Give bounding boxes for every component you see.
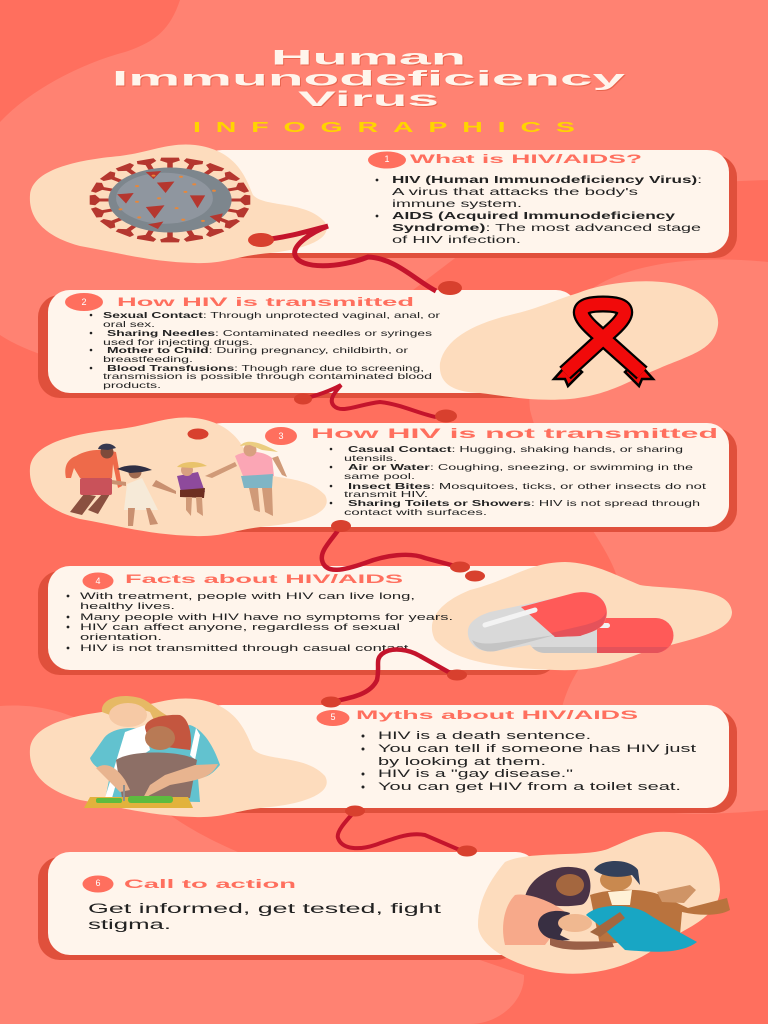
text: transmission list: Blood Transfusions : Though rare due to screening, (107, 364, 424, 373)
illustration: adult helping child cook (84, 696, 220, 808)
text: transmission list: breastfeeding. (103, 355, 193, 364)
text: myths list: You can get HIV from a toilet seat. (378, 781, 681, 793)
badge 5 (316, 710, 350, 726)
text: transmission list: used for injecting drugs. (103, 338, 253, 347)
text: non-transmission list: utensils. (344, 454, 397, 463)
text: HIV definition list: Syndrome) : The most advanced stage (392, 223, 701, 234)
text: call to action: Get informed, get tested, fight (88, 901, 441, 916)
panel: facts about HIV/AIDS (38, 562, 732, 675)
heading 6: Call to action (124, 879, 296, 891)
text: myths list: You can tell if someone has HIV just (378, 743, 696, 755)
text: non-transmission list: transmit HIV. (344, 490, 428, 499)
title: Immunodeficiency (112, 66, 625, 90)
badge 4: 4 (95, 576, 101, 586)
text: facts list: orientation. (80, 631, 162, 642)
text: HIV definition list: of HIV infection. (392, 235, 521, 246)
badge 3: 3 (278, 431, 284, 441)
text: myths list: HIV is a death sentence. (378, 730, 591, 742)
text: HIV definition list: A virus that attacks the body's (392, 187, 638, 198)
panel: what is HIV/AIDS (30, 144, 737, 263)
ribbon 5 (338, 806, 477, 856)
text: non-transmission list: Sharing Toilets or Showers : HIV is not spread through (348, 499, 701, 508)
text: HIV definition list: AIDS (Acquired Immunodeficiency (392, 211, 675, 222)
heading 4: Facts about HIV/AIDS (125, 572, 403, 586)
heading 2: How HIV is transmitted (117, 295, 414, 309)
text: transmission list: Sharing Needles : Contaminated needles or syringes (107, 329, 432, 338)
text: non-transmission list: Insect Bites : Mosquitoes, ticks, or other insects do not (348, 482, 707, 491)
ribbon 4 (321, 650, 467, 708)
text: transmission list: oral sex. (103, 320, 155, 329)
ribbon 3 (322, 520, 485, 582)
blob 5 (30, 698, 327, 817)
title: Human (271, 46, 466, 70)
blob 1 (30, 144, 327, 263)
title: Virus (298, 87, 439, 111)
badge 6: 6 (95, 878, 101, 888)
text: myths list (362, 730, 696, 793)
title (112, 46, 625, 111)
text: HIV definition list: immune system. (392, 199, 522, 210)
text: call to action: stigma. (88, 917, 171, 932)
text: transmission list: transmission is possible through contaminated blood (103, 372, 433, 381)
text: transmission list: products. (103, 381, 161, 390)
text: facts list: healthy lives. (80, 600, 175, 611)
text: transmission list: Sexual Contact : Through unprotected vaginal, anal, or (103, 311, 440, 320)
heading 5: Myths about HIV/AIDS (356, 708, 638, 722)
badge 6 (82, 876, 114, 892)
text: HIV definition list: HIV (Human Immunodeficiency Virus) : (392, 175, 702, 186)
badge 1 (368, 152, 406, 168)
badge 3 (265, 427, 297, 445)
blob 4 (432, 562, 732, 670)
subtitle: infographics: INFOGRAPHICS (193, 118, 575, 135)
illustration: children and adults dancing (65, 442, 287, 526)
badge 2: 2 (81, 297, 87, 307)
badge 4 (82, 572, 114, 590)
panel: call to action (38, 832, 730, 974)
text: facts list: Many people with HIV have no symptoms for years. (80, 611, 453, 622)
text: non-transmission list (330, 445, 707, 517)
text: transmission list (90, 311, 440, 390)
text: facts list (67, 590, 453, 653)
text: non-transmission list: Casual Contact : Hugging, shaking hands, or sharing (348, 445, 684, 454)
text: facts list: HIV can affect anyone, regardless of sexual (80, 621, 400, 632)
text: non-transmission list: same pool. (344, 472, 415, 481)
blob 6 (478, 832, 720, 974)
badge 1: 1 (384, 154, 390, 164)
badge 2 (65, 293, 103, 311)
text: non-transmission list: Air or Water : Coughing, sneezing, or swimming in the (348, 463, 694, 472)
text: myths list: by looking at them. (378, 756, 546, 768)
ribbon 2 (294, 385, 457, 422)
heading 1: What is HIV/AIDS? (410, 152, 642, 166)
illustration: family (503, 861, 730, 952)
text: facts list: With treatment, people with HIV can live long, (80, 590, 415, 601)
icon: virus (90, 158, 250, 242)
panel: how HIV is transmitted (38, 281, 718, 400)
text: call to action (88, 901, 441, 932)
illustration: capsules (468, 592, 674, 653)
text: transmission list: Mother to Child : During pregnancy, childbirth, or (107, 346, 408, 355)
text: facts list: HIV is not transmitted through casual contact. (80, 642, 413, 653)
loose bead (188, 428, 208, 440)
blob 2 (440, 281, 718, 400)
panel: how HIV is not transmitted (30, 417, 737, 536)
icon: red awareness ribbon (554, 304, 653, 386)
text: non-transmission list: contact with surfaces. (344, 508, 487, 517)
blob 3 (30, 417, 327, 536)
text: myths list: HIV is a "gay disease." (378, 768, 573, 780)
ribbon 1 (248, 226, 462, 295)
heading 3: How HIV is not transmitted (311, 426, 718, 441)
text: HIV definition list (376, 175, 702, 246)
badge 5: 5 (330, 712, 336, 722)
panel: myths about HIV/AIDS (30, 696, 737, 817)
